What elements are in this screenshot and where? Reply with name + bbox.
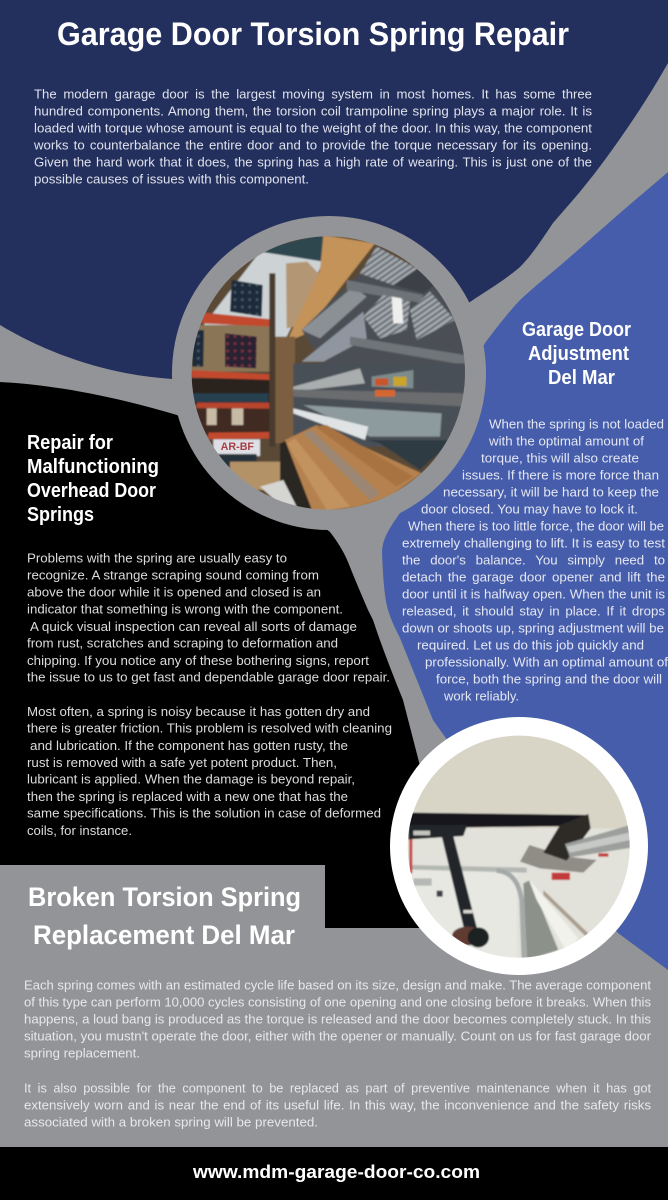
text block: cycle life: of this type can perform 10,000 cycles consisting of one opening and one closing before it breaks. When this — [24, 994, 652, 1010]
text block: noise and friction: and lubrication. If the component has gotten rusty, the — [30, 738, 348, 753]
text block: adjustment: required. Let us do this job quickly and — [417, 638, 644, 652]
photo: warehouse shelves with grey ring — [172, 216, 486, 530]
text block: spring problems: the issue to us to get fast and dependable garage door repair. — [27, 670, 390, 684]
text block: noise and friction: there is greater friction. This problem is resolved with cleaning — [27, 720, 392, 736]
title: Garage Door Torsion Spring Repair — [57, 16, 569, 52]
text block: adjustment: torque, this will also create — [481, 450, 639, 466]
heading: broken torsion spring replacement — [28, 882, 301, 950]
text block: cycle life: spring replacement. — [24, 1046, 140, 1060]
text block: spring problems — [27, 550, 390, 684]
text block: spring problems: chipping. If you notice any of these bothering signs, report — [27, 653, 369, 668]
text block: adjustment: detach the garage door opener and lift the — [402, 570, 665, 584]
text block: introduction: Given the hard work that it does, the spring has a high rate of wearing. This is just one of the — [34, 154, 592, 170]
text block: preventive maintenance — [24, 1080, 652, 1130]
text block: introduction: loaded with torque whose amount is equal to the weight of the door. In this way, the component — [34, 120, 592, 136]
text block: preventive maintenance: It is also possible for the component to be replaced as part of preventive maintenance when it has got — [24, 1080, 651, 1096]
text block: spring problems: indicator that something is wrong with the component. — [27, 602, 343, 616]
text block: preventive maintenance: associated with a broken spring will be prevented. — [24, 1114, 318, 1130]
text block: adjustment: door closed. You may have to lock it. — [421, 502, 638, 516]
heading: garage door adjustment — [522, 319, 631, 389]
heading: broken torsion spring replacement: Broken Torsion Spring — [28, 882, 301, 912]
text block: spring problems: recognize. A strange scraping sound coming from — [27, 568, 319, 582]
text block: cycle life — [24, 978, 652, 1060]
text block: adjustment: When there is too little force, the door will be — [408, 518, 664, 534]
text block: adjustment: professionally. With an optimal amount of — [425, 654, 668, 670]
text block: adjustment: issues. If there is more force than — [462, 468, 659, 482]
text block: spring problems: from rust, scratches and scraping to deformation and — [27, 636, 338, 650]
text block: adjustment: When the spring is not loaded — [489, 416, 664, 432]
text block: cycle life: situation, you mustn't operate the door, either with the opener or manually. Count on us for fast garage door — [24, 1028, 652, 1044]
text block: adjustment — [402, 416, 668, 704]
text block: preventive maintenance: extensively worn and is near the end of its useful life. In this way, the inconvenience and the safety risks — [24, 1098, 652, 1112]
text block: noise and friction: lubricant is applied. When the damage is beyond repair, — [27, 772, 355, 786]
heading: garage door adjustment: Adjustment — [528, 343, 629, 365]
text block: noise and friction — [27, 704, 392, 838]
panel: grey broken spring heading box — [0, 865, 325, 935]
text block: introduction: The modern garage door is the largest moving system in most homes. It has some three — [34, 86, 592, 102]
panel: footer bar — [0, 1147, 668, 1200]
text block: noise and friction: then the spring is replaced with a new one that has the — [27, 789, 348, 804]
heading: broken torsion spring replacement: Replacement Del Mar — [33, 920, 295, 950]
heading: repair for malfunctioning overhead door springs: Malfunctioning — [27, 456, 159, 478]
text block: adjustment: work reliably. — [443, 688, 519, 704]
heading: garage door adjustment: Garage Door — [522, 319, 631, 341]
panel: navy intro background — [0, 0, 668, 379]
text block: adjustment: necessary, it will be hard to keep the — [443, 484, 659, 500]
photo: torsion spring assembly with white ring — [390, 717, 648, 975]
text block: noise and friction: same specifications. This is the solution in case of deformed — [27, 806, 381, 820]
heading: garage door adjustment: Del Mar — [548, 367, 615, 389]
text block: introduction: possible causes of issues with this component. — [34, 172, 309, 186]
text block: spring problems: A quick visual inspection can reveal all sorts of damage — [30, 619, 357, 634]
heading: repair for malfunctioning overhead door springs: Repair for — [27, 432, 113, 454]
heading: repair for malfunctioning overhead door springs — [27, 432, 159, 526]
text block: adjustment: extremely challenging to lift. It is easy to test — [402, 536, 665, 550]
text block: cycle life: happens, a loud bang is produced as the torque is released and the door becomes completely stuck. In this — [24, 1012, 651, 1026]
text block: noise and friction: rust is removed with a safe yet potent product. Then, — [27, 755, 337, 770]
text block: noise and friction: coils, for instance. — [27, 823, 132, 838]
text block: introduction — [33, 86, 593, 186]
text block: adjustment: the door's balance. You simply need to — [402, 552, 665, 568]
text block: introduction: works to counterbalance the entire door and to provide the torque necessary for its opening. — [33, 138, 592, 152]
text block: adjustment: down or shoots up, spring adjustment will be — [402, 620, 664, 636]
heading: repair for malfunctioning overhead door springs: Springs — [27, 504, 94, 526]
text block: adjustment: force, both the spring and the door will — [436, 672, 662, 686]
photo sign text: AR-BF — [221, 441, 254, 453]
text block: spring problems: above the door while it is opened and closed is an — [27, 584, 321, 600]
text block: adjustment: door until it is halfway open. When the unit is — [402, 586, 665, 602]
panel: blue adjustment background — [382, 172, 668, 970]
text block: introduction: hundred components. Among them, the torsion coil trampoline spring plays a major role. It is — [34, 104, 592, 118]
text block: adjustment: with the optimal amount of — [488, 434, 644, 448]
panel: black repair background — [0, 382, 440, 928]
text block: cycle life: Each spring comes with an estimated cycle life based on its size, design and make. The average component — [24, 978, 651, 992]
text block: spring problems: Problems with the spring are usually easy to — [27, 550, 287, 566]
heading: repair for malfunctioning overhead door springs: Overhead Door — [27, 480, 156, 502]
text block: noise and friction: Most often, a spring is noisy because it has gotten dry and — [27, 704, 370, 719]
text block: adjustment: released, it should stay in place. If it drops — [402, 604, 666, 618]
footer website url: www.mdm-garage-door-co.com — [192, 1161, 480, 1182]
